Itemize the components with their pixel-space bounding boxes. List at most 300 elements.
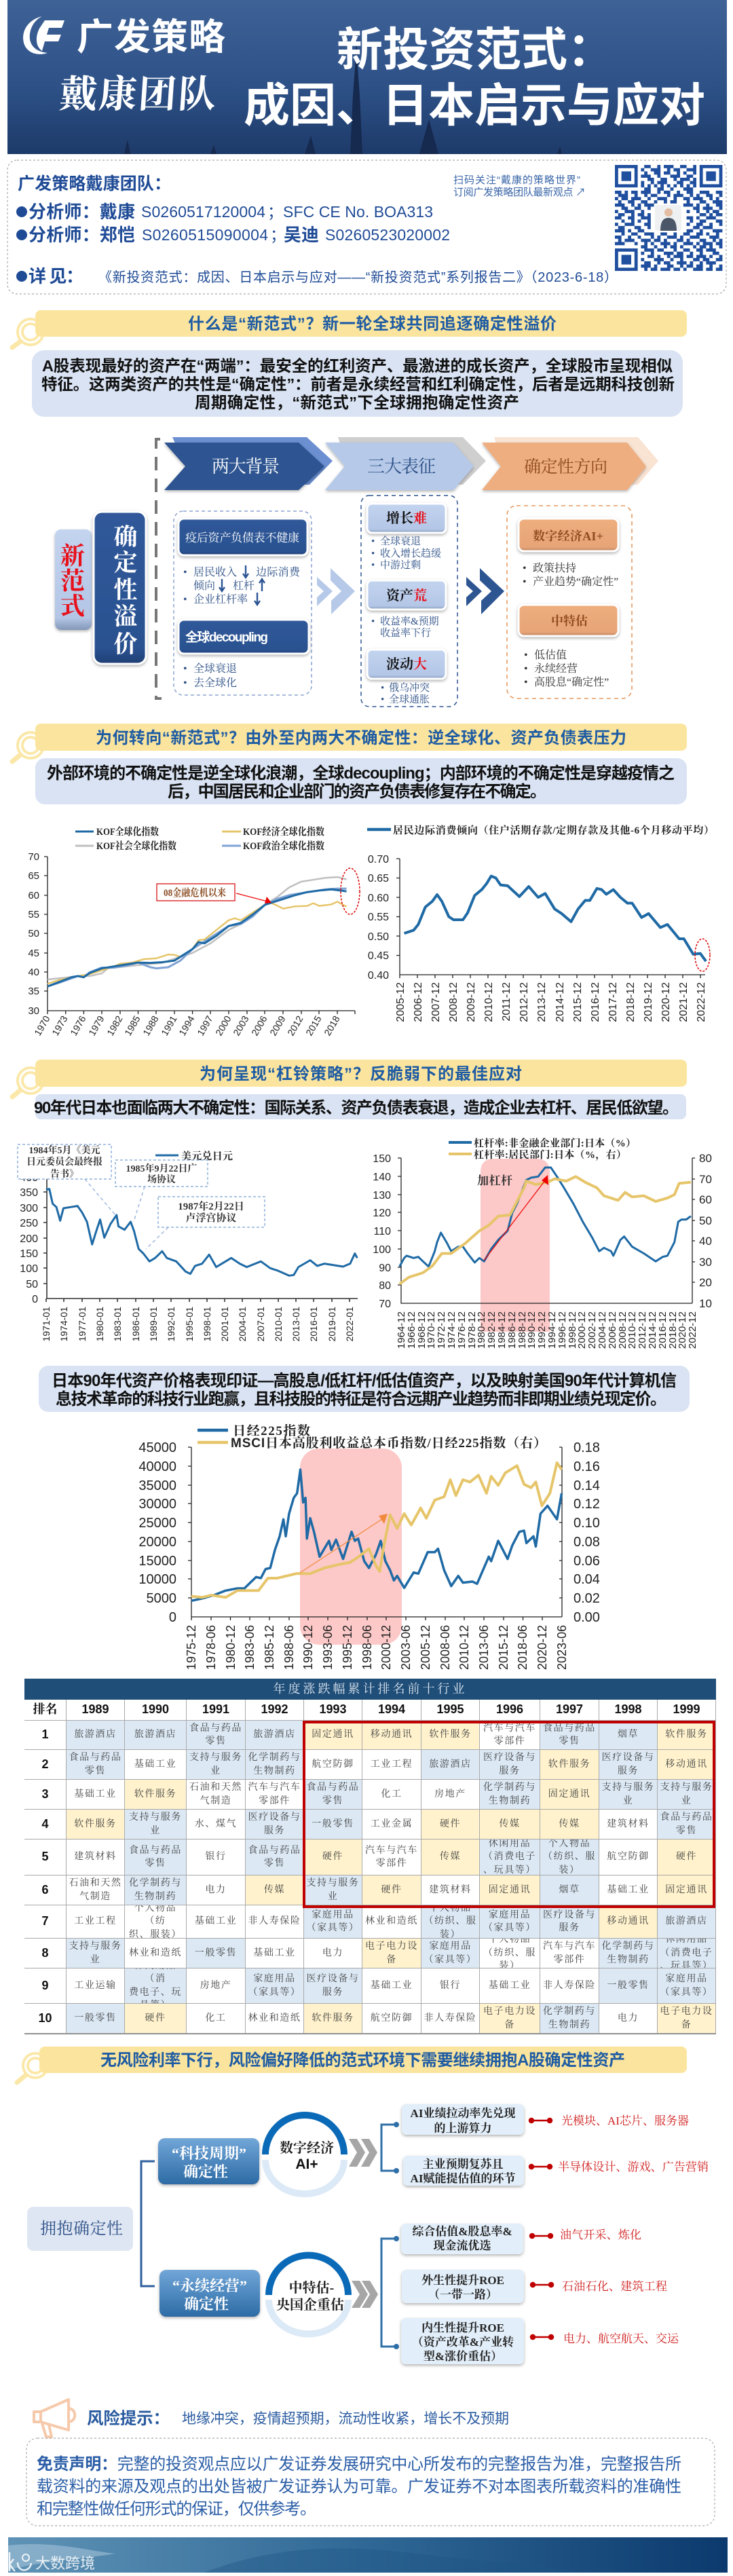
bullets: growth: 中游过剩 [380, 559, 421, 571]
axes [398, 1158, 695, 1303]
series line [46, 1189, 357, 1275]
right y axis labels: 0.00 [574, 1610, 600, 1625]
x axis labels: 2021-12 [678, 982, 690, 1022]
table grid: 固定通讯 [665, 1885, 708, 1895]
x axis labels: 2020-12 [660, 982, 672, 1022]
analyst line 1: ；SFC CE No. BOA313 [267, 203, 433, 221]
box: balance sheet: 疫后资产负债表不健康 [185, 531, 299, 544]
x axis labels: 1988-06 [282, 1625, 296, 1670]
table grid: 林业和造纸 [365, 1916, 418, 1926]
x axis labels: 2000-12 [576, 1311, 588, 1349]
report reference [16, 266, 618, 286]
callout: 1987: 卢浮宫协议 [185, 1212, 237, 1224]
bullets: volatility: 俄乌冲突 [389, 682, 430, 694]
box: AI upstream [402, 2104, 524, 2135]
box: AI valuation: 主业预期复苏且 [422, 2157, 504, 2171]
table grid: 业 [150, 1826, 161, 1835]
table grid: 医疗设备与 [307, 1974, 360, 1984]
y axis labels: 30 [28, 1005, 39, 1017]
table grid: 4 [41, 1817, 49, 1831]
y axis labels: 50 [26, 1279, 38, 1290]
table grid: 支持与服务 [307, 1878, 360, 1888]
analyst line 1 [16, 202, 433, 222]
x axis labels: 1980-12 [476, 1311, 487, 1349]
mountain shapes [8, 2544, 115, 2570]
table grid: 基础工业 [371, 1981, 413, 1991]
connectors: red links [529, 2118, 553, 2339]
table grid: 零售 [264, 1859, 285, 1869]
table grid: 支持与服务 [601, 1782, 654, 1793]
box: balance sheet [178, 519, 307, 555]
box: AI upstream: 的上游算力 [434, 2121, 491, 2135]
x axis labels: 1983-01 [112, 1307, 123, 1341]
x axis labels: 2007-01 [255, 1307, 266, 1341]
text block: definition: 周期确定性，“新范式”下全球拥抱确定性资产 [195, 394, 519, 411]
x axis labels: 2000-12 [379, 1625, 393, 1670]
left y axis labels: 130 [373, 1190, 391, 1201]
table grid: （家具等） [307, 1923, 360, 1933]
box: new paradigm: 新 [60, 542, 85, 570]
box: certainty premium: 溢 [113, 603, 138, 630]
table grid: 家庭用品 [429, 1941, 472, 1952]
y axis labels: 0.60 [368, 893, 389, 904]
callout: since 2008: 08金融危机以来 [164, 886, 226, 899]
icon: megaphone [34, 2400, 75, 2437]
box: embrace certainty: 拥抱确定性 [40, 2220, 123, 2238]
table grid: 服务 [559, 1923, 580, 1933]
x axis labels: 2015-12 [572, 982, 584, 1022]
box: certainty premium: 价 [113, 631, 138, 658]
x axis labels: 1994-12 [546, 1311, 558, 1349]
x axis labels: 2010-01 [273, 1307, 284, 1341]
legend: 杠杆率:居民部门:日本（%，右） [474, 1149, 626, 1161]
y axis labels: 0.40 [368, 970, 389, 982]
analyst line 2: ； [270, 226, 286, 244]
legend [75, 825, 324, 852]
table grid: 烟草 [559, 1885, 580, 1895]
table grid: 食品与药品 [307, 1782, 360, 1793]
callout: 1984 [18, 1144, 111, 1180]
table grid: 烟草 [618, 1730, 639, 1740]
left y axis labels: 70 [379, 1299, 391, 1310]
table grid: 生物制药 [489, 1796, 531, 1806]
box: volatility [367, 650, 446, 679]
footer band [8, 2537, 728, 2573]
table grid: 5 [41, 1850, 49, 1863]
table grid: 石油和天然 [189, 1782, 242, 1793]
table grid: 家庭用品 [489, 1910, 531, 1920]
box: exogenous ROE [402, 2270, 524, 2303]
box: value screen: 综合估值&股息率& [412, 2224, 512, 2238]
logo: GF mark: 广发策略 [77, 17, 225, 58]
table grid: 移动通讯 [665, 1759, 708, 1770]
table grid: 家庭用品 [312, 1910, 354, 1920]
x axis labels: 2022-12 [696, 982, 707, 1022]
table grid: 医疗设备与 [483, 1753, 536, 1763]
table grid [24, 1700, 716, 2034]
x axis labels: 2015-12 [497, 1625, 510, 1670]
x axis labels: 1990-12 [301, 1625, 315, 1670]
arrow: three features: 三大表征 [367, 457, 436, 477]
table grid: 林业和造纸 [248, 2013, 301, 2023]
bullets: AI: • [523, 563, 527, 574]
box: decoupling: 全球decoupling [185, 629, 268, 645]
arrow: direction: 确定性方向 [524, 458, 607, 477]
bullets: volatility: • [381, 683, 384, 694]
table grid: 医疗设备与 [543, 1910, 596, 1920]
table grid: 装） [559, 1865, 580, 1875]
table grid: 软件服务 [429, 1730, 472, 1740]
table grid: 一般零售 [607, 1981, 650, 1991]
panel: disclaimer [26, 2438, 715, 2526]
analyst line 2: 分析师：郑恺 [29, 225, 135, 245]
x axis labels: 2018-12 [667, 1311, 679, 1349]
y axis labels: 55 [28, 909, 39, 920]
legend: KOF经济全球化指数 [243, 825, 324, 838]
legend: 日经225指数 [233, 1423, 310, 1438]
bullets: decoupling [183, 662, 237, 689]
box: AI [519, 519, 618, 551]
table grid: 工业运输 [74, 1981, 117, 1991]
bullets: balance sheet: 企业杠杆率 [193, 593, 248, 605]
table grid: 食品与药品 [129, 1845, 182, 1856]
x axis labels: 2005-12 [419, 1625, 432, 1670]
table grid: 非人寿保险 [248, 1916, 301, 1926]
x axis labels: 2010-12 [626, 1311, 638, 1349]
text block: uncertainty: 外部环境的不确定性是逆全球化浪潮，全球decoupling；内部环境的不确定性是穿越疫情之 [47, 764, 675, 783]
series lines [400, 1168, 691, 1284]
table grid: 非人寿保险 [424, 2013, 476, 2023]
table grid: 1989 [81, 1702, 109, 1716]
table grid: 1999 [673, 1702, 700, 1716]
scan note: 订阅广发策略团队最新观点 ↗ [453, 187, 586, 198]
bullets: assets: • [371, 616, 375, 627]
arrow: dark chevron 1 [466, 577, 482, 606]
right y axis labels: 10 [699, 1297, 712, 1310]
table grid: 基础工业 [489, 1981, 531, 1991]
right y axis labels: 0.08 [574, 1535, 600, 1550]
legend: MSCI日本高股利收益总本币指数/日经225指数（右） [231, 1435, 546, 1451]
table grid: 软件服务 [312, 2013, 354, 2023]
x axis labels: 1980-01 [94, 1307, 105, 1341]
box: assets: 资产荒 [386, 588, 427, 603]
x axis labels: 1968-12 [416, 1311, 428, 1349]
y axis labels: 40 [28, 967, 39, 978]
chart: USD JPY [18, 1144, 358, 1341]
text block: definition [32, 350, 683, 417]
x axis labels: 1976 [68, 1013, 88, 1037]
table grid: 零部件 [494, 1736, 525, 1747]
table grid: 固定通讯 [548, 1789, 590, 1799]
callout: 1984: 1984年5月《美元 [29, 1144, 100, 1156]
text block: Japan assets: 日本90年代资产价格表现印证—高股息/低杠杆/低估值资产，以及映射美国90年代计算机信 [52, 1372, 677, 1390]
left y axis labels: 0 [169, 1610, 176, 1625]
table title: 年度涨跌幅累计排名前十行业 [273, 1682, 467, 1696]
table grid: 基础工业 [253, 1948, 296, 1958]
table grid: 化学制药与 [483, 1782, 536, 1793]
table grid: 3 [41, 1787, 49, 1801]
bullets: CSV [524, 649, 609, 688]
section heading 3: 为何呈现“杠铃策略”？反脆弱下的最佳应对 [200, 1065, 522, 1083]
table grid: 汽车与汽车 [365, 1845, 418, 1856]
table grid: （纺织、服 [483, 1948, 536, 1958]
table grid: 生物制药 [607, 1955, 650, 1964]
table grid: 房地产 [200, 1981, 231, 1991]
table grid: 1 [41, 1728, 49, 1741]
bullets: growth [371, 536, 441, 571]
box: volatility: 波动大 [386, 656, 427, 672]
x axis labels: 1972-12 [436, 1311, 447, 1349]
legend [198, 1423, 546, 1451]
right y axis labels: 60 [699, 1193, 712, 1206]
left y axis labels: 10000 [138, 1572, 176, 1587]
x axis labels: 2016-12 [590, 982, 601, 1022]
right y axis labels: 0.14 [574, 1478, 600, 1493]
x axis labels: 2001-01 [219, 1307, 230, 1341]
table grid: 硬件 [145, 2013, 166, 2023]
left y axis labels [138, 1440, 176, 1625]
section heading 2 [35, 724, 687, 751]
x axis labels [41, 1307, 355, 1341]
left y axis labels: 5000 [147, 1591, 176, 1606]
table grid: 旅游酒店 [429, 1759, 472, 1770]
table grid: 7 [41, 1914, 49, 1928]
connector: main bracket [141, 2161, 155, 2286]
box: AI upstream: AI业绩拉动率先兑现 [411, 2106, 515, 2120]
x axis labels [395, 982, 707, 1022]
x axis labels: 1994 [176, 1013, 197, 1037]
analyst line 2: 吴迪 [284, 225, 319, 245]
table grid: 医疗设备与 [248, 1812, 301, 1823]
y axis labels: 65 [28, 870, 39, 882]
x axis labels: 1995-01 [184, 1307, 195, 1341]
table grid: 房地产 [434, 1789, 466, 1799]
text block: uncertainty [35, 758, 687, 804]
table grid: 2 [41, 1757, 49, 1771]
bullets: AI: 产业趋势“确定性” [533, 576, 618, 588]
x axis labels: 2008-12 [617, 1311, 628, 1349]
series lines [191, 1463, 562, 1601]
y axis labels: 150 [20, 1248, 38, 1260]
right y axis labels: 0.06 [574, 1554, 600, 1569]
table grid: 零部件 [259, 1796, 290, 1806]
table grid: 食品与药品 [248, 1845, 301, 1856]
y axis labels: 250 [20, 1218, 38, 1229]
left y axis labels: 100 [373, 1244, 391, 1256]
ring: state enterprises [269, 2256, 348, 2334]
left y axis labels: 20000 [138, 1535, 176, 1550]
left y axis labels: 40000 [138, 1459, 176, 1474]
right y axis labels: 20 [699, 1276, 712, 1289]
bullets: CSV: • [524, 663, 528, 675]
x axis labels: 2013-06 [477, 1625, 491, 1670]
table grid: 费电子、玩 [129, 1987, 182, 1997]
arrow: chevron top 2 [361, 2139, 377, 2167]
table grid: 化学制药与 [129, 1878, 182, 1888]
bullets: AI [523, 562, 618, 588]
arrow: light chevron 2 [331, 568, 355, 614]
y axis labels: 45 [28, 948, 39, 959]
table grid: 食品与药品 [543, 1723, 596, 1734]
table grid: （家具等） [660, 1987, 713, 1997]
table grid: 气制造 [79, 1891, 111, 1902]
box: growth [367, 504, 446, 533]
table grid: 业 [623, 1796, 633, 1806]
table grid: 建筑材料 [74, 1852, 117, 1862]
y axis labels: 60 [28, 890, 39, 901]
bullets: balance sheet: 居民收入 [193, 566, 237, 578]
bullets: AI: 政策扶持 [533, 562, 576, 574]
legend: KOF社会全球化指数 [96, 840, 176, 852]
table grid: 服务 [499, 1766, 521, 1776]
callout: 1987 [158, 1197, 265, 1227]
box: CSV [519, 605, 618, 636]
x axis labels: 1998-06 [360, 1625, 374, 1670]
table grid: 电子电力设 [365, 1941, 418, 1952]
callout leader lines [85, 1179, 168, 1249]
table grid: 服务 [618, 1766, 639, 1776]
axes [44, 857, 355, 1014]
x axis labels: 1998-01 [202, 1307, 212, 1341]
table grid: 6 [41, 1883, 49, 1897]
table grid: 旅游酒店 [74, 1730, 117, 1740]
box: tech cycle [158, 2138, 259, 2184]
red sector labels [558, 2114, 709, 2345]
legend: KOF政治全球化指数 [243, 840, 324, 852]
panel: disclaimer: 免责声明：完整的投资观点应以广发证券发展研究中心所发布的完整报告为准，完整报告所 [37, 2455, 681, 2474]
table grid: 软件服务 [74, 1819, 117, 1829]
right y axis labels: 30 [699, 1256, 712, 1269]
x axis labels: 1992-01 [166, 1307, 176, 1341]
panel: directions [507, 506, 632, 698]
header banner [7, 0, 727, 154]
table grid: 1996 [496, 1702, 523, 1716]
x axis labels: 1986-01 [130, 1307, 141, 1341]
x axis labels: 1986-12 [506, 1311, 518, 1349]
table grid: 化学制药与 [601, 1941, 654, 1952]
table grid: 生物制药 [134, 1891, 176, 1902]
x axis labels: 1977-01 [77, 1307, 88, 1341]
chart: Japan leverage [373, 1137, 712, 1349]
x axis labels: 1974-12 [446, 1311, 457, 1349]
table grid: （纺织、服 [424, 1916, 476, 1926]
table grid: 移动通讯 [371, 1730, 413, 1740]
box: exogenous ROE: （一带一路） [428, 2288, 497, 2301]
analyst line 2: S0260515090004 [142, 226, 268, 244]
x axis labels: 2022-01 [344, 1307, 355, 1341]
section heading 4 [39, 2047, 687, 2073]
scan note: 扫码关注“戴康的策略世界” [453, 174, 580, 186]
y axis labels: 0.50 [368, 931, 389, 943]
table grid: 航空防御 [371, 2013, 413, 2023]
icon: magnifier 2 [12, 732, 43, 762]
title [244, 24, 705, 132]
box: endogenous ROE: （资产改革&产业转 [412, 2335, 514, 2349]
arrow: light chevron 1 [317, 577, 333, 606]
box: value screen: 现金流优选 [433, 2239, 491, 2252]
x axis labels: 1983-06 [243, 1625, 257, 1670]
x axis labels: 1989-01 [148, 1307, 159, 1341]
bullets: balance sheet: • [183, 594, 187, 605]
x axis labels: 1995-12 [341, 1625, 354, 1670]
highlight ellipse [341, 868, 360, 914]
y axis labels [368, 854, 389, 982]
box: perpetual operation [159, 2270, 260, 2317]
table grid: 软件服务 [665, 1730, 708, 1740]
left y axis labels: 45000 [138, 1440, 176, 1455]
table grid: 零售 [322, 1796, 343, 1806]
series lines [48, 877, 347, 986]
box: certainty premium: 性 [113, 577, 138, 603]
bullets: balance sheet: 杠杆 [233, 580, 255, 592]
table grid: 1990 [142, 1702, 169, 1716]
table grid: 硬件 [676, 1852, 697, 1862]
callout: 1987: 1987年2月22日 [178, 1200, 244, 1212]
dashed divider [156, 439, 162, 698]
x axis labels: 2013-01 [290, 1307, 301, 1341]
table grid: 汽车与汽车 [543, 1941, 596, 1952]
bullets: growth: • [371, 536, 375, 547]
table grid: （家具等） [483, 1923, 536, 1933]
panel: disclaimer: 载资料的来源及观点的出处皆被广发证券认为可靠。广发证券不对本图表所载资料的准确性 [37, 2478, 681, 2496]
risk warning [87, 2409, 509, 2428]
section heading 2: 为何转向“新范式”？由外至内两大不确定性：逆全球化、资产负债表压力 [96, 728, 626, 747]
arrow: chevron bottom 2 [362, 2281, 378, 2308]
table grid: 食品与药品 [660, 1812, 713, 1823]
x axis labels: 2006-12 [607, 1311, 618, 1349]
x axis labels: 1985 [122, 1013, 143, 1037]
x axis labels: 2018 [322, 1013, 342, 1037]
left y axis labels: 120 [373, 1208, 391, 1219]
x axis labels: 1978-06 [204, 1625, 218, 1670]
scan note [453, 174, 586, 198]
table grid: 1997 [556, 1702, 583, 1716]
section heading 1: 什么是“新范式”？新一轮全球共同追逐确定性溢价 [188, 315, 557, 333]
arrow: dark chevron 2 [480, 568, 504, 614]
right y axis labels: 0.10 [574, 1516, 600, 1531]
table grid: 1994 [378, 1702, 405, 1716]
x axis labels: 1982-12 [486, 1311, 497, 1349]
y axis labels: 300 [20, 1203, 38, 1214]
bullets: balance sheet [183, 565, 301, 605]
table grid: 医疗设备与 [601, 1753, 654, 1763]
x axis labels: 1993-06 [321, 1625, 335, 1670]
x axis labels: 2016-01 [308, 1307, 319, 1341]
series line [405, 876, 706, 961]
x axis labels: 2003-06 [399, 1625, 413, 1670]
skyline silhouette [124, 37, 562, 154]
red sector labels: 石油石化、建筑工程 [562, 2280, 667, 2293]
right y axis labels: 0.02 [574, 1591, 600, 1606]
table grid: 非人寿保险 [543, 1981, 596, 1991]
table grid: 建筑材料 [429, 1885, 472, 1895]
x axis labels: 2006-12 [413, 982, 424, 1022]
left y axis labels: 90 [379, 1263, 391, 1274]
y axis labels: 0.55 [368, 912, 389, 923]
table grid: 林业和造纸 [129, 1948, 182, 1958]
table grid: 服务 [322, 1987, 343, 1997]
x axis labels: 2010-12 [483, 982, 495, 1022]
x axis labels: 1966-12 [406, 1311, 417, 1349]
y axis labels: 70 [28, 851, 39, 863]
table grid: 电子电力设 [483, 2006, 536, 2017]
watermark [10, 2552, 95, 2572]
table grid: 支持与服务 [189, 1753, 242, 1763]
box: growth: 增长难 [386, 510, 427, 526]
x axis labels: 1975-12 [185, 1625, 198, 1670]
ring: digital economy [265, 2115, 344, 2194]
table grid: 工业金属 [371, 1819, 413, 1829]
